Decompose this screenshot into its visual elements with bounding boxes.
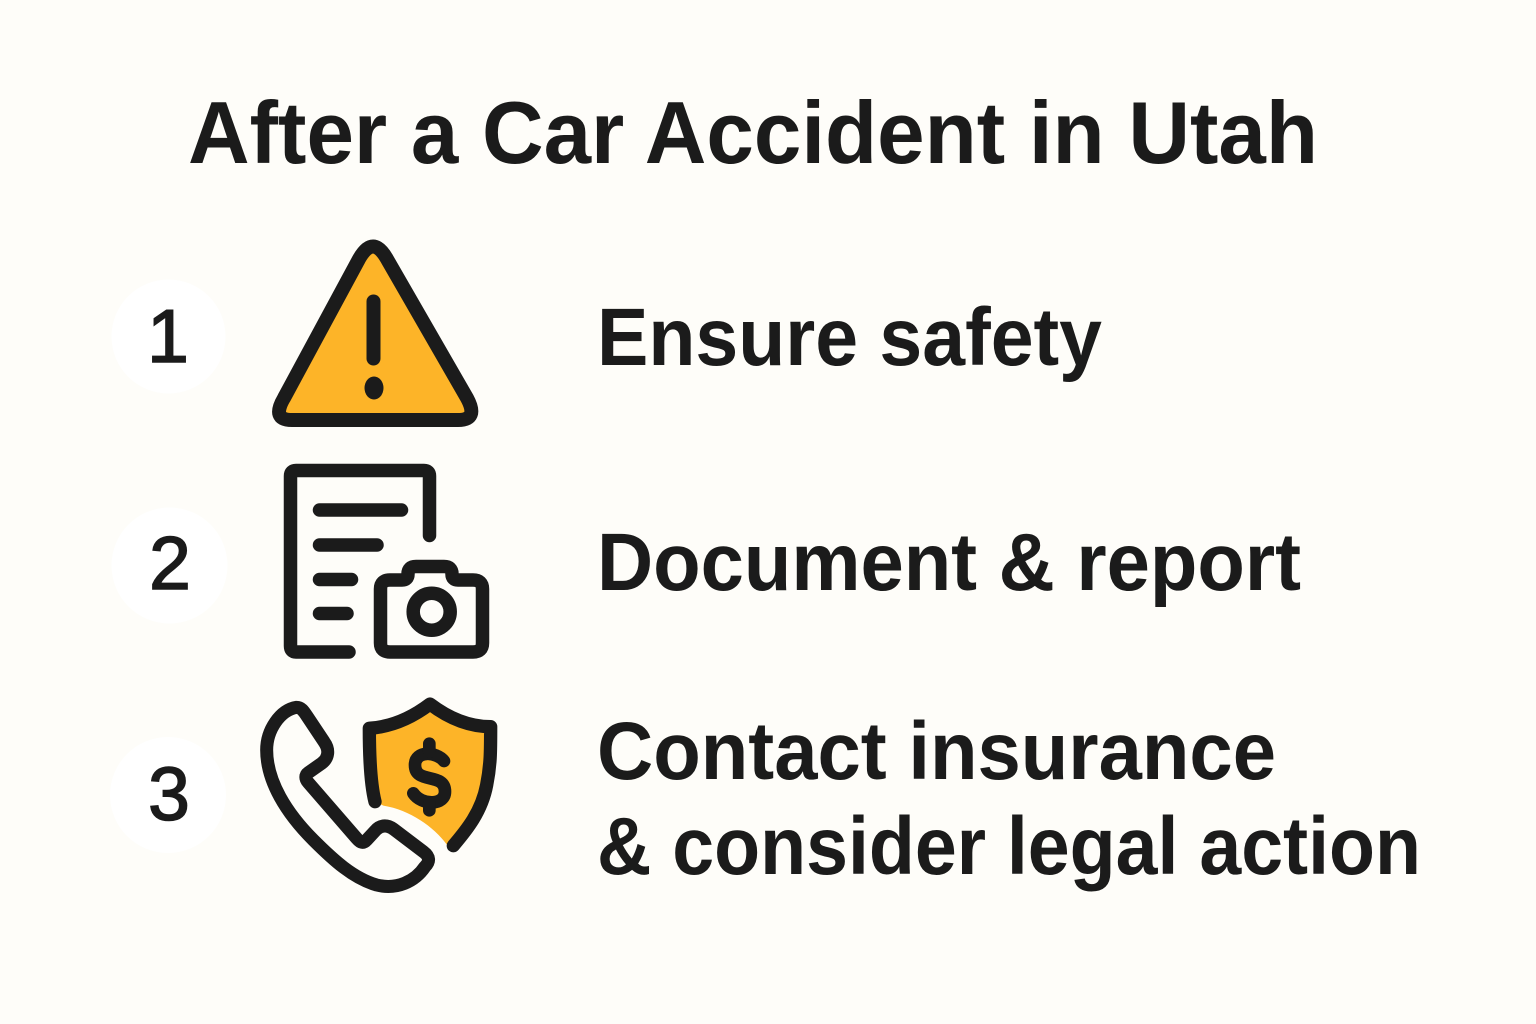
step 3 label: [597, 706, 1421, 892]
number badge 1: [112, 280, 226, 394]
panel: step 1 ensure safety: [112, 246, 1102, 420]
step 2 label: Document & report: [597, 517, 1301, 608]
step 3 label: Contact insurance: [597, 706, 1276, 797]
number badge 3: 3: [148, 752, 190, 836]
title: After a Car Accident in Utah: [188, 83, 1318, 182]
number badge 3: [110, 737, 226, 853]
shield: [369, 704, 491, 846]
number badge 2: 2: [149, 521, 191, 605]
number badge 2: [112, 508, 228, 624]
step 1 label: Ensure safety: [597, 292, 1102, 383]
number badge 1: 1: [147, 294, 189, 378]
phone handset: [267, 707, 429, 886]
icon: phone and shield with dollar: [267, 704, 491, 886]
step 3 label: & consider legal action: [597, 801, 1421, 892]
icon: document with camera: [290, 470, 482, 652]
dollar sign: [413, 744, 445, 810]
panel: step 2 document and report: [112, 470, 1301, 652]
icon: warning triangle: [279, 246, 471, 420]
panel: step 3 contact insurance: [110, 704, 1421, 892]
